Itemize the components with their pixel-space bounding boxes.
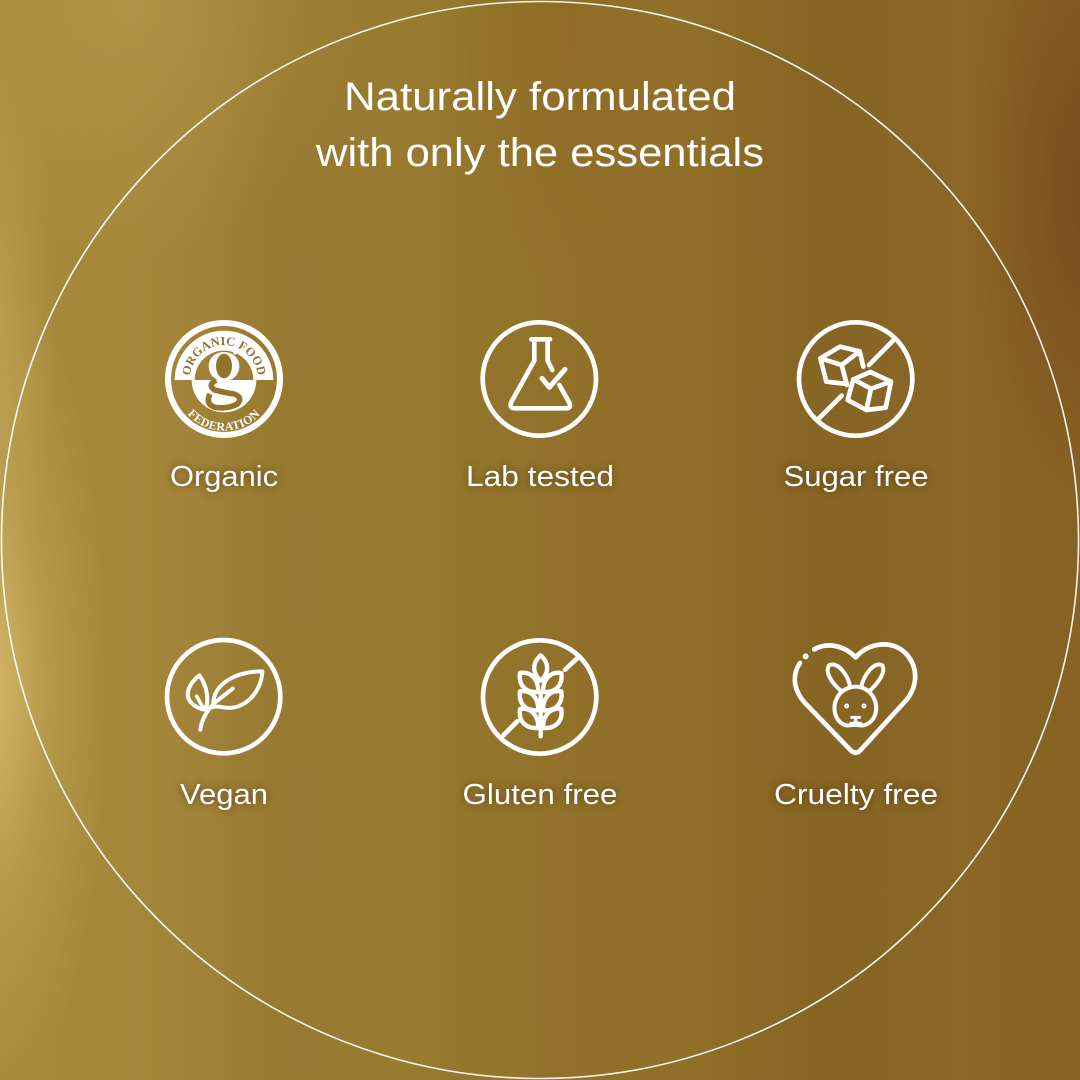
title	[315, 75, 764, 175]
icon: lab tested flask	[483, 322, 596, 436]
label: vegan: Vegan	[180, 779, 268, 811]
badge text: organic food: ORGANIC FOOD	[182, 337, 266, 374]
icon: gluten free wheat	[483, 640, 596, 754]
icon: sugar free cubes	[799, 322, 912, 436]
title: Naturally formulated	[344, 75, 736, 119]
label: organic: Organic	[170, 461, 278, 493]
icon: cruelty free rabbit heart	[795, 644, 915, 753]
label: cruelty free: Cruelty free	[774, 779, 938, 811]
icon: organic food federation badge	[165, 320, 283, 438]
label: sugar free: Sugar free	[784, 461, 928, 493]
badge text: federation: FEDERATION	[188, 408, 260, 431]
label: lab tested: Lab tested	[466, 461, 614, 493]
label: gluten free: Gluten free	[462, 779, 618, 811]
title: with only the essentials	[315, 131, 764, 175]
icon: vegan leaf	[167, 640, 280, 753]
